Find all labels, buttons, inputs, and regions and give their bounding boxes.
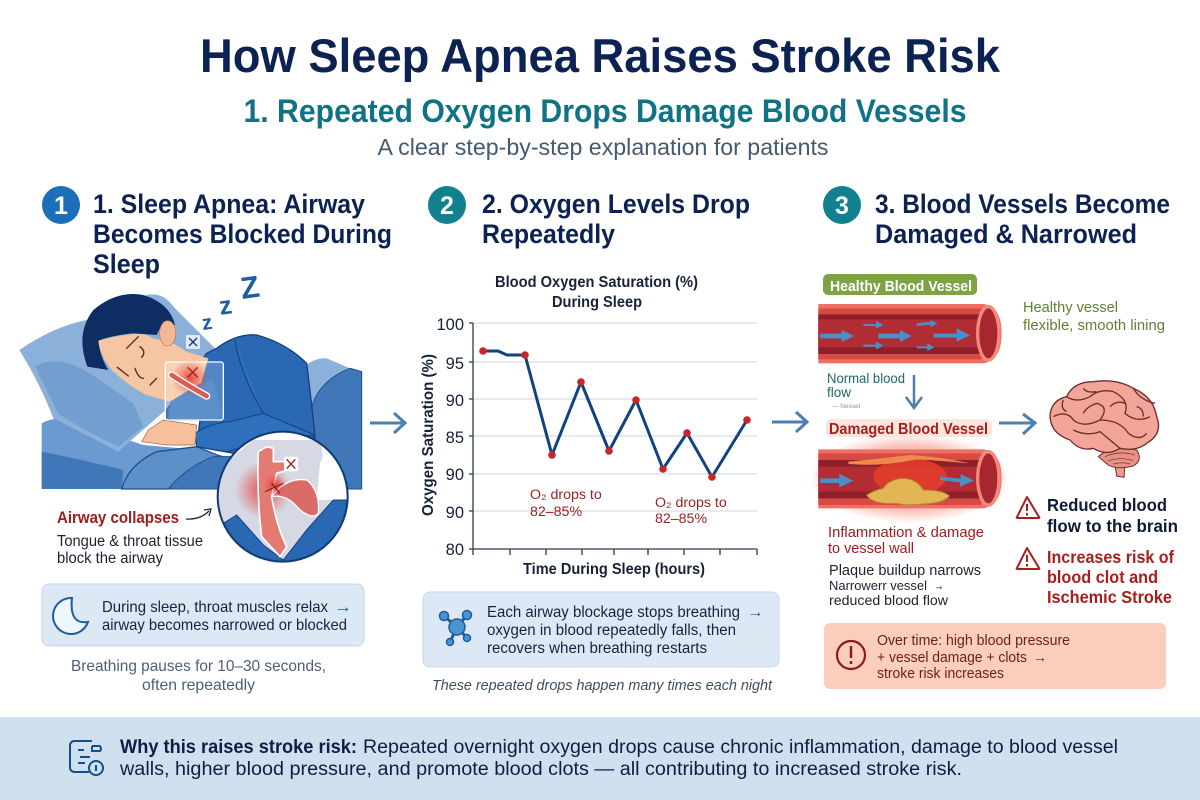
marker: x on neck	[186, 335, 200, 349]
chart title: Blood Oxygen Saturation (%)	[495, 274, 698, 291]
italic note: These repeated drops happen many times each night	[432, 678, 773, 694]
hair	[82, 294, 175, 370]
pillow	[19, 294, 215, 452]
y axis labels: 90	[446, 466, 464, 484]
panel: airway note: airway becomes narrowed or blocked	[102, 617, 347, 634]
arrow: step 2 to 3	[772, 412, 807, 432]
breathing pauses note	[71, 658, 326, 694]
hand	[142, 420, 197, 445]
neck	[147, 337, 208, 402]
heading: step 3	[823, 186, 1170, 249]
plaque note: →	[934, 578, 944, 593]
arrow: step 1 to 2	[370, 413, 405, 433]
plaque note: Narrowerr vessel	[829, 578, 927, 593]
data points	[479, 347, 751, 481]
panel: over time: stroke risk increases	[877, 666, 1004, 682]
y axis labels: 85	[446, 429, 464, 447]
y axis labels: 90	[446, 392, 464, 410]
annotation: second drop: 82–85%	[655, 511, 707, 527]
normal blood flow note: Normal blood	[827, 370, 905, 386]
panel: oxygen note: recovers when breathing restarts	[487, 640, 707, 657]
icon: document info	[70, 741, 103, 775]
face	[98, 333, 170, 395]
snoring z letters: Z	[238, 270, 262, 306]
illustration: sleeping man with blocked airway	[19, 270, 362, 563]
heading: step 1: 1	[54, 192, 68, 220]
y axis labels: 95	[446, 355, 464, 373]
normal blood flow note	[827, 370, 905, 410]
warning: stroke risk: Increases risk of	[1047, 547, 1174, 567]
icon: moon	[53, 598, 88, 634]
panel: oxygen note	[423, 592, 779, 667]
title: How Sleep Apnea Raises Stroke Risk	[200, 29, 1001, 82]
bed and blanket	[42, 358, 362, 489]
annotation: first drop: O₂ drops to	[530, 487, 602, 503]
healthy vessel note	[1023, 299, 1165, 334]
illustration: vessels and brain	[810, 304, 1159, 523]
arrow: vessel to brain	[999, 414, 1035, 434]
footer banner: Why this raises stroke risk:	[120, 737, 357, 758]
panel: airway note: →	[334, 599, 352, 616]
panel: over time: →	[1033, 650, 1047, 666]
chart: blood oxygen saturation	[420, 274, 757, 578]
icon: alert circle	[837, 641, 865, 669]
callout: airway collapses: Tongue & throat tissue	[57, 533, 203, 550]
warning: reduced blood flow	[1017, 495, 1178, 536]
inflammation note	[828, 524, 984, 557]
footer banner: Repeated overnight oxygen drops cause chronic inflammation, damage to blood vessel	[363, 737, 1118, 758]
callout: airway collapses: block the airway	[57, 550, 163, 567]
y axis labels: 80	[446, 541, 464, 559]
snoring z letters: z	[200, 311, 214, 335]
subtitle: 1. Repeated Oxygen Drops Damage Blood Vessels	[244, 93, 966, 129]
panel: airway note	[42, 584, 364, 646]
heading: step 2: 2	[440, 192, 454, 220]
sleeve	[195, 340, 315, 452]
breathing pauses note: Breathing pauses for 10–30 seconds,	[71, 658, 326, 675]
plaque note: Plaque buildup narrows	[829, 563, 981, 579]
plaque note: reduced blood flow	[829, 592, 949, 608]
x axis title: Time During Sleep (hours)	[523, 561, 705, 578]
healthy vessel	[818, 304, 1002, 363]
heading: step 2: 2. Oxygen Levels Drop	[482, 189, 750, 219]
normal blood flow note: — Nessel	[832, 403, 861, 410]
oxygen line	[483, 351, 747, 477]
chart title	[495, 274, 698, 311]
heading: step 3: Damaged & Narrowed	[875, 219, 1137, 249]
warning: reduced blood flow: flow to the brain	[1047, 516, 1178, 536]
snoring z letters	[200, 270, 262, 335]
heading: step 2	[428, 186, 750, 249]
neck callout window	[165, 360, 223, 420]
panel: oxygen note: →	[747, 604, 764, 621]
warning: stroke risk: Ischemic Stroke	[1047, 587, 1172, 607]
warning: reduced blood flow: Reduced blood	[1047, 495, 1167, 515]
heading: step 3: 3	[835, 192, 849, 220]
panel: airway note: During sleep, throat muscles relax	[102, 599, 328, 616]
heading: step 1: 1. Sleep Apnea: Airway	[93, 189, 365, 219]
footer banner	[0, 717, 1200, 800]
arrow: healthy to damaged	[906, 375, 922, 408]
panel: over time: + vessel damage + clots	[877, 650, 1027, 666]
airway inset circle	[217, 432, 348, 563]
icon: molecule	[440, 610, 472, 646]
heading: step 1: Becomes Blocked During	[93, 219, 392, 249]
y axis labels: 90	[446, 504, 464, 522]
healthy vessel note: Healthy vessel	[1023, 299, 1118, 316]
heading: step 2: Repeatedly	[482, 219, 615, 249]
healthy vessel note: flexible, smooth lining	[1023, 317, 1165, 334]
body in pajamas	[167, 335, 315, 457]
label: healthy vessel: Healthy Blood Vessel	[830, 278, 972, 295]
callout: airway collapses: Airway collapses	[57, 508, 179, 527]
heading: step 3: 3. Blood Vessels Become	[875, 189, 1170, 219]
chart title: During Sleep	[552, 294, 642, 311]
inflammation note: to vessel wall	[828, 540, 914, 557]
callout: airway collapses	[57, 508, 211, 567]
normal blood flow note: flow	[827, 384, 852, 400]
warning: stroke risk	[1017, 547, 1174, 607]
y axis labels	[436, 316, 464, 559]
y axis title: Oxygen Saturation (%)	[420, 354, 437, 516]
ear	[160, 321, 176, 346]
snoring z letters: z	[217, 291, 234, 321]
panel: oxygen note: Each airway blockage stops breathing	[487, 604, 740, 621]
plaque note	[829, 563, 981, 608]
annotation: first drop: 82–85%	[530, 504, 582, 520]
warning: stroke risk: blood clot and	[1047, 567, 1158, 587]
panel: oxygen note: oxygen in blood repeatedly falls, then	[487, 622, 736, 639]
inflammation note: Inflammation & damage	[828, 524, 984, 541]
panel: over time: Over time: high blood pressure	[877, 633, 1070, 649]
eyes and mouth	[117, 337, 157, 385]
heading: step 1	[42, 186, 392, 279]
tagline: A clear step-by-step explanation for patients	[378, 134, 828, 160]
footer banner: walls, higher blood pressure, and promote blood clots — all contributing to increased stroke risk.	[119, 759, 962, 780]
damaged vessel	[810, 433, 1010, 523]
annotation: second drop: O₂ drops to	[655, 495, 727, 511]
panel: over time	[824, 623, 1166, 689]
icon: brain	[1050, 381, 1159, 477]
heading: step 1: Sleep	[93, 249, 160, 279]
label: damaged vessel: Damaged Blood Vessel	[829, 421, 988, 438]
y axis labels: 100	[436, 316, 464, 334]
breathing pauses note: often repeatedly	[142, 677, 255, 694]
